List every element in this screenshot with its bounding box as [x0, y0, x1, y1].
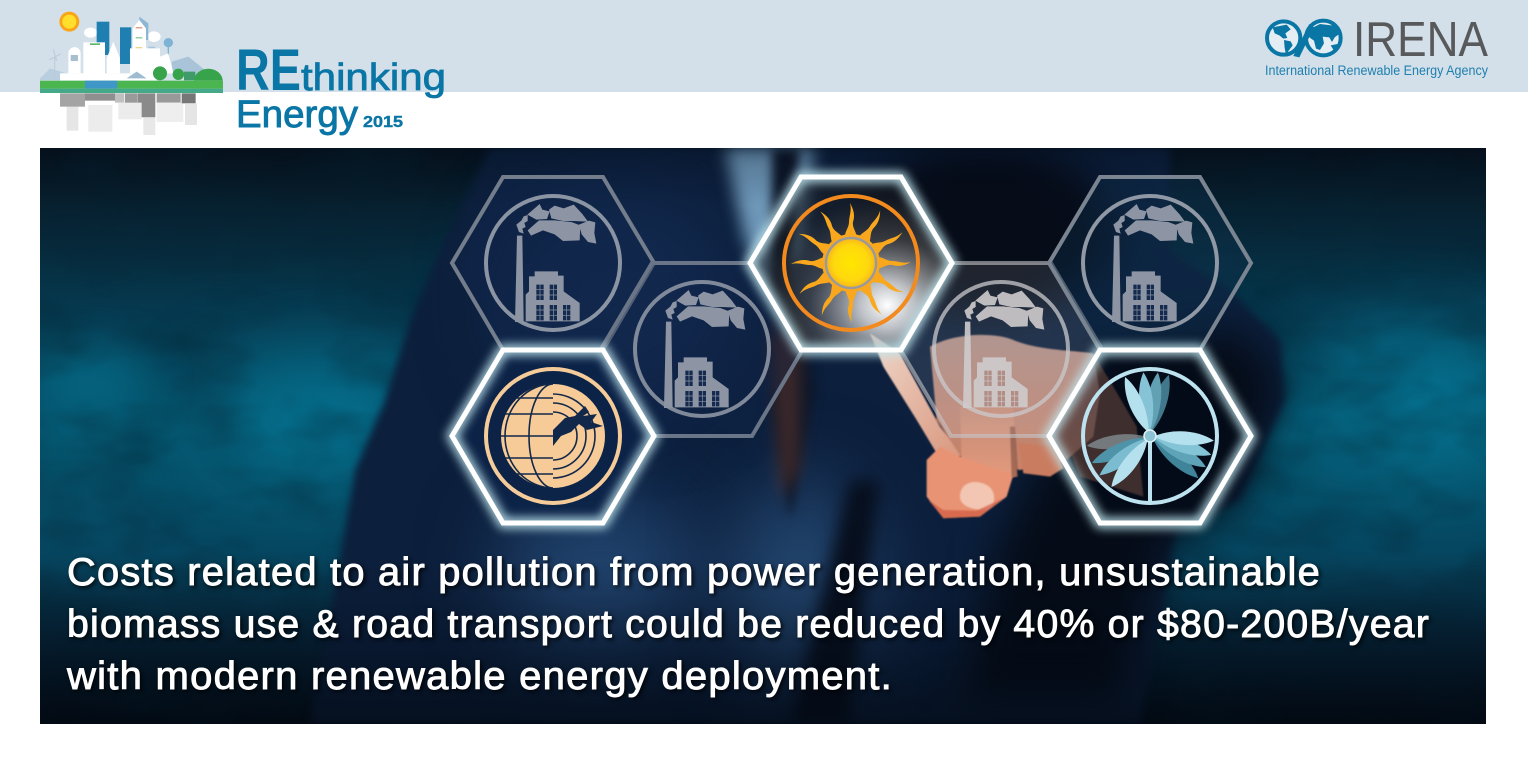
hexagon: factory top left: [452, 177, 654, 350]
header band: [0, 0, 1528, 92]
green ground strip: [40, 81, 223, 93]
photo panel: [30, 145, 1528, 724]
headline: [66, 551, 1430, 698]
logo title: REthinking Energy 2015: RE: [236, 38, 301, 103]
reflected grey city: [60, 93, 197, 135]
logo: IRENA: [1265, 13, 1488, 78]
agency name: International Renewable Energy Agency: [1265, 63, 1488, 78]
logo title: REthinking Energy 2015: Energy: [236, 94, 358, 136]
icon: sun: [59, 12, 79, 32]
hexagon: sun (lit): [750, 177, 952, 350]
hand pointing: [870, 333, 1143, 518]
logo: REthinking Energy city illustration: [40, 12, 223, 135]
IRENA wordmark: IRENA: [1353, 13, 1488, 67]
headline: Costs related to air pollution from power generation, unsustainable: [67, 551, 1321, 594]
hexagon: wind turbine (lit): [1049, 350, 1251, 523]
headline: biomass use & road transport could be reduced by 40% or $80-200B/year: [67, 603, 1430, 646]
hexagon: factory top right: [1049, 177, 1251, 350]
background: blurred businessman photo: [30, 145, 1528, 724]
logo title: REthinking Energy 2015: 2015: [363, 114, 403, 131]
logo title: REthinking Energy 2015: [236, 38, 446, 136]
icon: turbine: [1086, 372, 1214, 502]
hexagon: factory centre left: [601, 263, 803, 436]
hexagon: globe with wind (lit): [452, 350, 654, 523]
icon: globe: [501, 384, 605, 488]
icon: sun rays: [791, 203, 911, 323]
icon: infinity globe: [1267, 21, 1341, 57]
headline: with modern renewable energy deployment.: [66, 655, 893, 698]
logo title: REthinking Energy 2015: thinking: [301, 57, 446, 99]
city skyline: [40, 17, 223, 81]
hexagon: factory centre right over hand: [900, 263, 1102, 436]
